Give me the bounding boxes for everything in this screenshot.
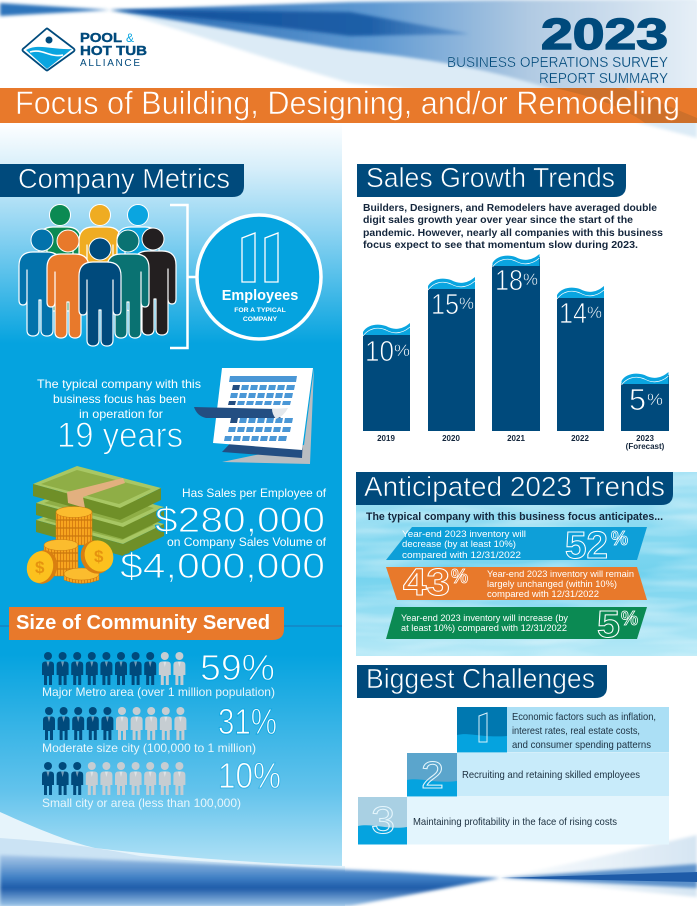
chart: major metro 59%: Major Metro area (over 1 million population) — [42, 685, 275, 699]
text: years in operation: The typical company with this — [37, 377, 201, 391]
heading: Size of Community Served — [9, 607, 284, 640]
icon: group of employees — [19, 204, 176, 346]
callout: inventory unchanged 43%: % — [451, 566, 468, 588]
chart: moderate city 31%: 31% — [218, 701, 277, 742]
bar: 2020 15%: % — [459, 294, 474, 313]
bar: 2020 15%: 2020 — [442, 434, 460, 443]
report year and subtitle: 2023 — [541, 10, 668, 59]
callout: inventory decrease 52% — [386, 525, 647, 567]
footer swoosh — [0, 812, 697, 906]
bar: 2019 10%: 2019 — [377, 434, 395, 443]
bar chart: sales growth — [363, 254, 669, 451]
callout: inventory unchanged 43%: 43 — [403, 562, 450, 604]
text: sales growth summary: digit sales growth year over year since the start of the — [363, 214, 633, 226]
challenge 3: 3 — [371, 800, 395, 842]
callout: inventory increase 5%: at least 10%) compared with 12/31/2022 — [401, 623, 567, 634]
challenge 1: and consumer spending patterns — [512, 739, 651, 751]
callout: 11 employees — [197, 215, 321, 339]
challenge 3: Maintaining profitability in the face of rising costs — [413, 816, 617, 828]
bar: 2023 forecast 5%: (Forecast) — [626, 442, 665, 451]
callout: 11 employees: Employees — [222, 288, 298, 304]
text: trends intro: The typical company with this business focus anticipates... — [366, 511, 663, 523]
callout: inventory unchanged 43%: largely unchanged (within 10%) — [487, 579, 617, 590]
icon: money and coins: $ — [94, 547, 104, 566]
bar: 2022 14%: % — [587, 303, 602, 322]
callout: inventory unchanged 43%: compared with 12/31/2022 — [487, 589, 599, 600]
logo: Pool & Hot Tub Alliance: & — [126, 31, 134, 45]
bar: 2019 10%: 10 — [365, 336, 394, 368]
text: years in operation: in operation for — [79, 407, 163, 421]
logo: Pool & Hot Tub Alliance: HOT TUB — [80, 43, 147, 58]
challenge 1 — [457, 707, 669, 752]
bar: 2021 18%: % — [523, 270, 538, 289]
heading: Anticipated 2023 Trends: Anticipated 2023 Trends — [364, 471, 665, 502]
bar: 2023 forecast 5%: 5 — [629, 382, 646, 417]
text: sales growth summary — [363, 202, 663, 251]
bar: 2023 forecast 5%: % — [647, 390, 663, 409]
callout: inventory unchanged 43%: Year-end 2023 inventory will remain — [487, 569, 634, 580]
callout: 11 employees: FOR A TYPICAL — [234, 307, 286, 314]
chart: major metro 59%: 59% — [200, 647, 275, 688]
text: sales growth summary: focus expect to see that momentum slow during 2023. — [363, 239, 638, 251]
challenge 2: Recruiting and retaining skilled employees — [462, 769, 640, 781]
logo: Pool & Hot Tub Alliance: ALLIANCE — [80, 58, 140, 69]
text: sales figures: on Company Sales Volume of — [167, 535, 327, 549]
callout: inventory increase 5% — [386, 604, 647, 646]
callout: inventory unchanged 43% — [386, 562, 647, 604]
bar: 2019 10%: % — [394, 341, 410, 360]
callout: inventory decrease 52%: % — [611, 528, 628, 550]
callout: inventory decrease 52%: compared with 12/31/2022 — [402, 550, 521, 561]
chart: moderate city 31% — [42, 701, 277, 755]
logo: Pool & Hot Tub Alliance — [22, 28, 147, 70]
callout: inventory increase 5%: 5 — [597, 604, 620, 646]
text: years in operation — [37, 377, 201, 455]
callout: inventory increase 5%: % — [621, 608, 638, 630]
callout: inventory decrease 52%: decrease (by at least 10%) — [402, 539, 516, 550]
bar: 2022 14%: 2022 — [571, 434, 589, 443]
bar: 2022 14%: 14 — [559, 298, 587, 330]
panel: left column background — [0, 123, 342, 883]
icon: calendar — [194, 368, 314, 464]
challenge 1: Economic factors such as inflation, — [512, 711, 656, 723]
chart: small city 10%: Small city or area (less than 100,000) — [42, 796, 241, 810]
text: years in operation: 19 years — [57, 416, 183, 455]
heading: Sales Growth Trends: Sales Growth Trends — [366, 162, 615, 193]
bar: 2021 18% — [492, 254, 540, 443]
text: years in operation: business focus has been — [53, 392, 186, 406]
bar: 2023 forecast 5%: 2023 — [636, 434, 654, 443]
bar: 2022 14% — [557, 286, 604, 443]
challenge 2: 2 — [421, 755, 444, 797]
bar: 2023 forecast 5% — [621, 372, 669, 451]
report year and subtitle: REPORT SUMMARY — [539, 70, 668, 87]
bar: 2020 15%: 15 — [431, 289, 459, 321]
bar: 2020 15% — [428, 277, 475, 443]
heading: Biggest Challenges: Biggest Challenges — [366, 663, 595, 694]
text: sales figures: $4,000,000 — [120, 547, 325, 586]
heading: Company Metrics: Company Metrics — [18, 163, 230, 194]
bar: 2021 18%: 2021 — [507, 434, 525, 443]
bracket — [170, 205, 198, 348]
logo: Pool & Hot Tub Alliance: POOL — [80, 30, 122, 45]
title band: Focus of Building, Designing, and/or Remodeling — [15, 85, 680, 121]
chart: small city 10%: 10% — [218, 755, 281, 796]
callout: inventory increase 5%: Year-end 2023 inventory will increase (by — [401, 613, 568, 624]
header swoosh — [0, 0, 697, 138]
challenge 1: interest rates, real estate costs, — [512, 725, 640, 737]
report year and subtitle — [447, 10, 668, 87]
text: sales figures — [120, 486, 327, 586]
text: sales growth summary: Builders, Designers, and Remodelers have averaged double — [363, 202, 657, 214]
heading: Size of Community Served: Size of Community Served — [16, 611, 270, 634]
challenge 2 — [407, 753, 669, 797]
text: sales figures: Has Sales per Employee of — [182, 486, 327, 500]
callout: inventory decrease 52%: 52 — [565, 525, 608, 567]
chart: major metro 59% — [42, 647, 275, 699]
chart: small city 10% — [42, 755, 281, 810]
icon: money and coins: $ — [35, 558, 45, 577]
report year and subtitle: BUSINESS OPERATIONS SURVEY — [447, 54, 668, 71]
panel: anticipated trends — [356, 471, 697, 656]
icon: money and coins — [23, 466, 164, 587]
challenge 3 — [358, 797, 669, 844]
callout: 11 employees: COMPANY — [243, 316, 278, 323]
chart: moderate city 31%: Moderate size city (100,000 to 1 million) — [42, 741, 256, 755]
bar: 2019 10% — [363, 323, 410, 443]
text: sales growth summary: pandemic. However, nearly all companies with this business — [363, 227, 663, 239]
bar: 2021 18%: 18 — [495, 265, 523, 297]
text: sales figures: $280,000 — [155, 501, 325, 540]
callout: inventory decrease 52%: Year-end 2023 inventory will — [402, 529, 526, 540]
